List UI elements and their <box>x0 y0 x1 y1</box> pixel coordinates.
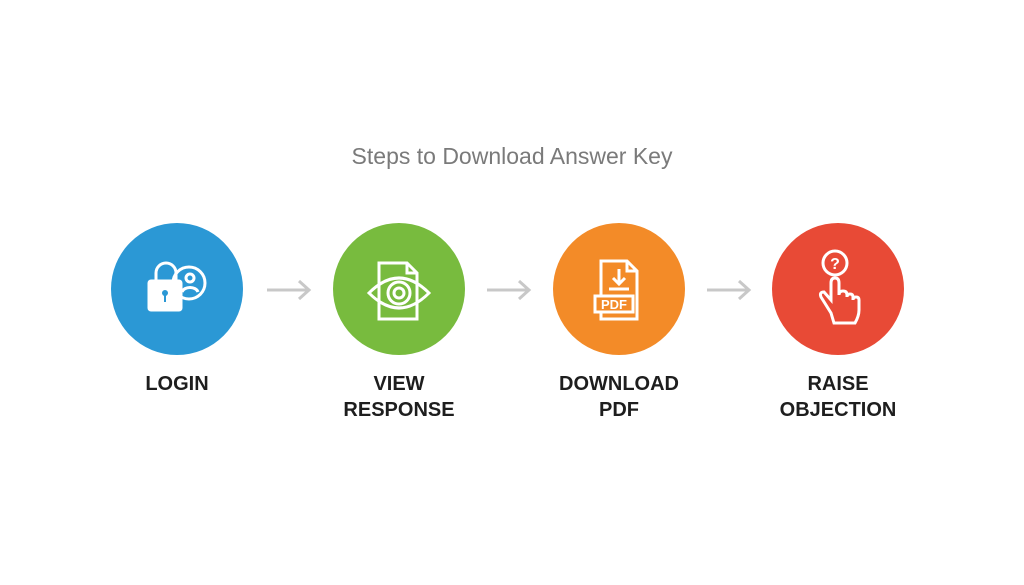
label: view response: VIEW <box>373 373 425 395</box>
icon: question and pointing hand: ? <box>830 256 840 273</box>
icon: document with eye <box>369 263 429 319</box>
icon: lock with user <box>149 263 205 310</box>
arrow 1 <box>267 280 311 300</box>
step 3: download pdf circle <box>553 223 685 355</box>
arrow 2 <box>487 280 531 300</box>
label: raise objection: RAISE <box>807 373 869 395</box>
label: raise objection <box>780 373 896 421</box>
icon: pdf download: PDF <box>601 297 627 312</box>
label: raise objection: OBJECTION <box>780 399 896 421</box>
step 4: raise objection circle <box>772 223 904 355</box>
title: Steps to Download Answer Key <box>352 143 672 169</box>
label: download pdf: DOWNLOAD <box>559 373 679 395</box>
step 1: login circle <box>111 223 243 355</box>
step 2: view response circle <box>333 223 465 355</box>
arrow 3 <box>707 280 751 300</box>
label: login: LOGIN <box>145 373 209 395</box>
label: download pdf <box>559 373 679 421</box>
label: view response: RESPONSE <box>343 399 455 421</box>
label: view response <box>343 373 455 421</box>
label: download pdf: PDF <box>599 399 639 421</box>
